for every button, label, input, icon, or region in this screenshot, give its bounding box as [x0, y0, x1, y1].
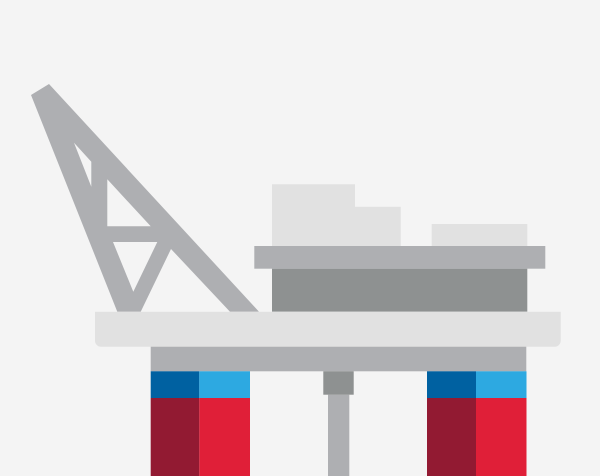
right leg blue band, light side [476, 371, 526, 398]
left leg red, light side [199, 398, 250, 476]
right leg blue band, dark side [427, 371, 476, 398]
main deck [95, 312, 561, 347]
right leg red, dark side [427, 398, 476, 476]
centre cap [323, 371, 354, 395]
centre pole [328, 395, 349, 476]
right leg red, light side [476, 398, 526, 476]
tall upper building [272, 184, 401, 246]
lower grey beam [151, 347, 526, 371]
crane boom with truss openings [31, 84, 259, 312]
left leg blue band, light side [199, 371, 250, 398]
left leg blue band, dark side [151, 371, 199, 398]
dark module block [272, 269, 527, 312]
low upper building [432, 224, 527, 246]
upper deck beam [254, 246, 545, 269]
centre support [323, 371, 354, 476]
left leg red, dark side [151, 398, 199, 476]
left leg [151, 371, 250, 476]
right leg [427, 371, 526, 476]
